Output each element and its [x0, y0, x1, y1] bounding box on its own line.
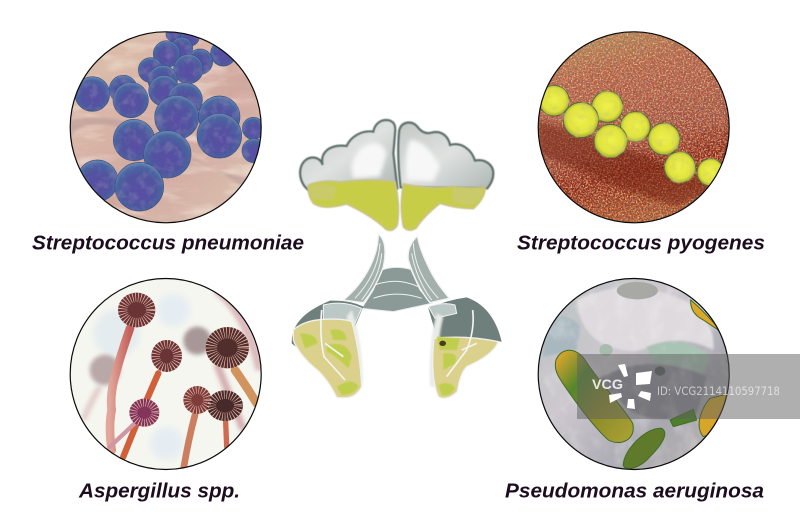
icon: fungal stalks: [110, 328, 257, 470]
frontal sinus right: [398, 123, 493, 230]
icon: fungal spore heads: [118, 293, 249, 427]
watermark logo: [592, 364, 652, 409]
icon: yellow cocci chain: [539, 85, 724, 186]
maxillary sinus left: [292, 301, 363, 398]
watermark band: [577, 354, 800, 419]
panel: Aspergillus micrograph: [67, 277, 267, 477]
watermark logo: VCG: [592, 377, 623, 392]
icon: blue cocci cluster: [75, 27, 266, 211]
spore radial striations: [123, 297, 243, 423]
maxillary sinus right: [428, 297, 502, 398]
blurred background conidiophores: [83, 290, 260, 430]
panel: Streptococcus pneumoniae micrograph: [67, 27, 267, 227]
label: Aspergillus spp.: Aspergillus spp.: [78, 480, 240, 502]
circle outlines: [70, 32, 729, 470]
frontal sinus left: [300, 120, 399, 230]
sphenoid and strands: [343, 234, 449, 312]
panel: Streptococcus pyogenes micrograph: [537, 30, 733, 227]
label: Streptococcus pyogenes: Streptococcus pyogenes: [517, 232, 765, 254]
icon: rod bacteria: [555, 300, 730, 469]
watermark id: ID: VCG2114110597718: [657, 384, 780, 398]
label: Streptococcus pneumoniae: Streptococcus pneumoniae: [32, 232, 304, 254]
label: Pseudomonas aeruginosa: Pseudomonas aeruginosa: [505, 480, 764, 502]
illustration: paranasal sinuses: [292, 120, 502, 398]
panel: Pseudomonas micrograph: [537, 277, 733, 473]
